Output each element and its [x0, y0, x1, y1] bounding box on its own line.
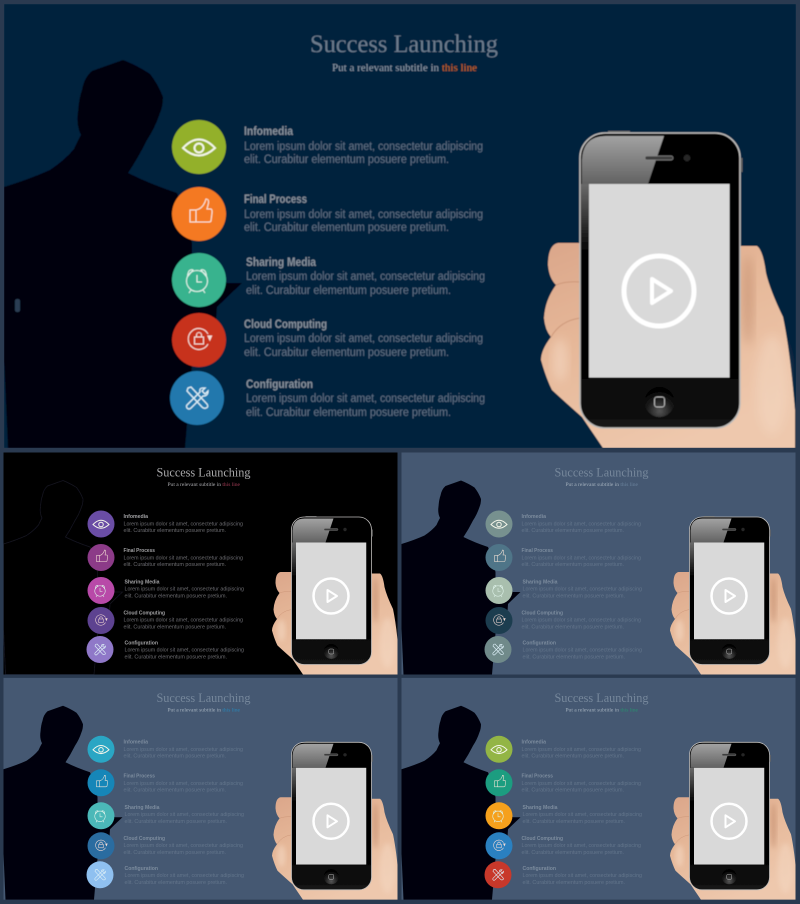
item: Configuration — [86, 636, 244, 663]
item: Final Process: Lorem ipsum dolor sit amet, consectetur adipiscing — [522, 556, 641, 562]
pocket detail — [15, 299, 20, 312]
item: Sharing Media: Sharing Media — [522, 580, 558, 586]
icon: alarm clock — [172, 253, 226, 307]
item: Sharing Media: Lorem ipsum dolor sit amet, consectetur adipiscing — [124, 586, 244, 592]
item text: Infomedia — [244, 126, 294, 138]
item: Configuration: Lorem ipsum dolor sit amet, consectetur adipiscing — [522, 873, 642, 879]
item: Cloud Computing — [172, 313, 483, 367]
item: Infomedia — [486, 510, 641, 538]
item: Cloud Computing: elit. Curabitur elementum posuere pretium. — [522, 850, 624, 856]
item: Infomedia: Lorem ipsum dolor sit amet, consectetur adipiscing — [124, 747, 243, 753]
slide background — [4, 678, 398, 900]
item: Cloud Computing — [486, 832, 641, 859]
item: Configuration: elit. Curabitur elementum posuere pretium. — [124, 654, 227, 660]
item: Sharing Media — [172, 253, 485, 307]
title: Success Launching — [310, 31, 498, 58]
item text — [244, 126, 483, 166]
item text: elit. Curabitur elementum posuere pretium. — [244, 154, 449, 166]
item: Final Process: Lorem ipsum dolor sit amet, consectetur adipiscing — [522, 781, 641, 787]
item: Infomedia: elit. Curabitur elementum posuere pretium. — [522, 753, 624, 759]
item: Configuration: Configuration — [124, 640, 158, 646]
slide background — [402, 452, 796, 674]
item text: Cloud Computing — [244, 319, 327, 331]
item text — [244, 319, 483, 359]
item: Cloud Computing: Cloud Computing — [124, 610, 165, 616]
item: Configuration: Lorem ipsum dolor sit amet, consectetur adipiscing — [522, 648, 642, 654]
silhouette of man — [4, 480, 122, 674]
hand holding phone — [670, 572, 797, 674]
item: Final Process: Final Process — [522, 548, 553, 554]
item text: Lorem ipsum dolor sit amet, consectetur adipiscing — [244, 141, 483, 153]
item: Cloud Computing — [88, 607, 243, 634]
item text: Lorem ipsum dolor sit amet, consectetur adipiscing — [244, 333, 483, 345]
item: Configuration: Lorem ipsum dolor sit amet, consectetur adipiscing — [124, 873, 244, 879]
item: Final Process: Lorem ipsum dolor sit amet, consectetur adipiscing — [124, 556, 243, 562]
panel: slate blue variant — [4, 678, 399, 900]
item: Configuration: elit. Curabitur elementum posuere pretium. — [522, 654, 625, 660]
item: Configuration — [484, 636, 642, 663]
item text — [246, 257, 485, 297]
item: Cloud Computing: Lorem ipsum dolor sit amet, consectetur adipiscing — [124, 618, 243, 624]
item: Final Process — [88, 544, 243, 571]
item: Cloud Computing: Cloud Computing — [522, 836, 563, 842]
item: Infomedia: Infomedia — [522, 739, 547, 745]
item: Final Process — [486, 769, 641, 796]
subtitle: Put a relevant subtitle in this line — [566, 482, 639, 488]
phone with play icon — [690, 741, 771, 890]
item: Sharing Media: Lorem ipsum dolor sit amet, consectetur adipiscing — [124, 812, 244, 818]
item: Final Process: elit. Curabitur elementum posuere pretium. — [522, 787, 624, 793]
item: Final Process — [172, 187, 483, 241]
hand holding phone — [272, 797, 399, 900]
item: Infomedia — [88, 736, 243, 763]
hand holding phone — [541, 243, 795, 448]
item: Cloud Computing: Lorem ipsum dolor sit amet, consectetur adipiscing — [124, 843, 243, 849]
item text: Lorem ipsum dolor sit amet, consectetur adipiscing — [244, 209, 483, 221]
panel: dark purple variant — [4, 452, 399, 674]
item: Final Process: Final Process — [522, 773, 553, 779]
silhouette of man — [4, 706, 122, 900]
item: Sharing Media: Sharing Media — [124, 805, 160, 811]
panel: slate multicolour variant — [402, 678, 797, 900]
item: Infomedia — [88, 510, 243, 538]
title: Success Launching — [554, 466, 649, 480]
item: Cloud Computing: Cloud Computing — [124, 836, 165, 842]
item: Configuration — [170, 371, 485, 425]
item: Configuration: Configuration — [522, 866, 556, 872]
slide background — [4, 452, 398, 674]
item: Infomedia — [172, 120, 483, 174]
item: Cloud Computing — [486, 607, 641, 634]
slide background — [402, 678, 796, 900]
panel: main slide — [4, 4, 796, 448]
item text: Configuration — [246, 379, 313, 391]
item: Cloud Computing — [88, 832, 243, 859]
hand holding phone — [670, 797, 797, 900]
item: Cloud Computing: elit. Curabitur elementum posuere pretium. — [522, 624, 624, 630]
item: Cloud Computing: Lorem ipsum dolor sit amet, consectetur adipiscing — [522, 843, 641, 849]
item: Cloud Computing: elit. Curabitur elementum posuere pretium. — [124, 624, 226, 630]
item text: elit. Curabitur elementum posuere pretium. — [246, 285, 451, 297]
title: Success Launching — [554, 691, 649, 705]
phone with play icon — [292, 741, 373, 890]
item: Sharing Media — [88, 577, 244, 604]
phone with play icon — [690, 516, 771, 664]
icon: thumbs up — [172, 187, 226, 241]
item: Sharing Media — [88, 802, 244, 829]
panel: slate muted variant — [402, 452, 797, 674]
item text: elit. Curabitur elementum posuere pretium. — [244, 347, 449, 359]
subtitle: Put a relevant subtitle in this line — [168, 707, 241, 713]
item text: Lorem ipsum dolor sit amet, consectetur adipiscing — [246, 271, 485, 283]
subtitle: Put a relevant subtitle in this line — [566, 707, 639, 713]
item: Final Process: elit. Curabitur elementum posuere pretium. — [124, 787, 226, 793]
item text: Lorem ipsum dolor sit amet, consectetur adipiscing — [246, 393, 485, 405]
item: Infomedia: Infomedia — [124, 514, 149, 520]
item: Sharing Media — [486, 577, 642, 604]
silhouette of man — [4, 60, 242, 448]
item: Sharing Media: elit. Curabitur elementum posuere pretium. — [124, 819, 227, 825]
hand holding phone — [272, 572, 399, 674]
slide background — [4, 4, 796, 448]
item: Infomedia: elit. Curabitur elementum posuere pretium. — [522, 528, 624, 534]
subtitle: Put a relevant subtitle in this line — [168, 482, 241, 488]
item text — [244, 194, 483, 234]
icon: lock — [172, 313, 226, 367]
title: Success Launching — [156, 691, 251, 705]
item text: Sharing Media — [246, 257, 317, 269]
item: Sharing Media: Lorem ipsum dolor sit amet, consectetur adipiscing — [522, 586, 642, 592]
item: Cloud Computing: Lorem ipsum dolor sit amet, consectetur adipiscing — [522, 618, 641, 624]
item: Infomedia: Infomedia — [124, 739, 149, 745]
item: Sharing Media: Lorem ipsum dolor sit amet, consectetur adipiscing — [522, 812, 642, 818]
item: Final Process — [88, 769, 243, 796]
item: Infomedia: Lorem ipsum dolor sit amet, consectetur adipiscing — [124, 522, 243, 528]
item: Infomedia: Lorem ipsum dolor sit amet, consectetur adipiscing — [522, 522, 641, 528]
subtitle: Put a relevant subtitle in this line — [332, 62, 477, 74]
item: Final Process: elit. Curabitur elementum posuere pretium. — [522, 562, 624, 568]
item: Infomedia: elit. Curabitur elementum posuere pretium. — [124, 528, 226, 534]
item: Infomedia: Lorem ipsum dolor sit amet, consectetur adipiscing — [522, 747, 641, 753]
item: Configuration — [484, 861, 642, 888]
item: Final Process: elit. Curabitur elementum posuere pretium. — [124, 562, 226, 568]
item: Sharing Media: elit. Curabitur elementum posuere pretium. — [522, 594, 625, 600]
item: Configuration: elit. Curabitur elementum posuere pretium. — [522, 880, 625, 886]
item: Infomedia: Infomedia — [522, 514, 547, 520]
item: Configuration: Lorem ipsum dolor sit amet, consectetur adipiscing — [124, 648, 244, 654]
title: Success Launching — [156, 466, 251, 480]
item: Sharing Media: elit. Curabitur elementum posuere pretium. — [124, 594, 227, 600]
item: Sharing Media: Sharing Media — [124, 580, 160, 586]
item: Configuration: elit. Curabitur elementum posuere pretium. — [124, 880, 227, 886]
item: Sharing Media: Sharing Media — [522, 805, 558, 811]
item: Final Process: Lorem ipsum dolor sit amet, consectetur adipiscing — [124, 781, 243, 787]
item text: elit. Curabitur elementum posuere pretium. — [244, 222, 449, 234]
silhouette of man — [402, 480, 520, 674]
item: Sharing Media: elit. Curabitur elementum posuere pretium. — [522, 819, 625, 825]
item text: Final Process — [244, 194, 307, 206]
item: Configuration: Configuration — [124, 866, 158, 872]
item: Configuration: Configuration — [522, 640, 556, 646]
icon: tools — [170, 371, 224, 425]
item: Configuration — [86, 861, 244, 888]
item: Cloud Computing: elit. Curabitur elementum posuere pretium. — [124, 850, 226, 856]
icon: eye — [172, 120, 226, 174]
item text — [246, 379, 485, 419]
item: Cloud Computing: Cloud Computing — [522, 610, 563, 616]
item: Final Process: Final Process — [124, 548, 155, 554]
silhouette of man — [402, 706, 520, 900]
item: Infomedia — [486, 736, 641, 763]
item: Infomedia: elit. Curabitur elementum posuere pretium. — [124, 753, 226, 759]
item: Sharing Media — [486, 802, 642, 829]
item: Final Process: Final Process — [124, 773, 155, 779]
phone with play icon — [580, 131, 742, 428]
item: Final Process — [486, 544, 641, 571]
phone with play icon — [292, 516, 373, 664]
item text: elit. Curabitur elementum posuere pretium. — [246, 407, 451, 419]
